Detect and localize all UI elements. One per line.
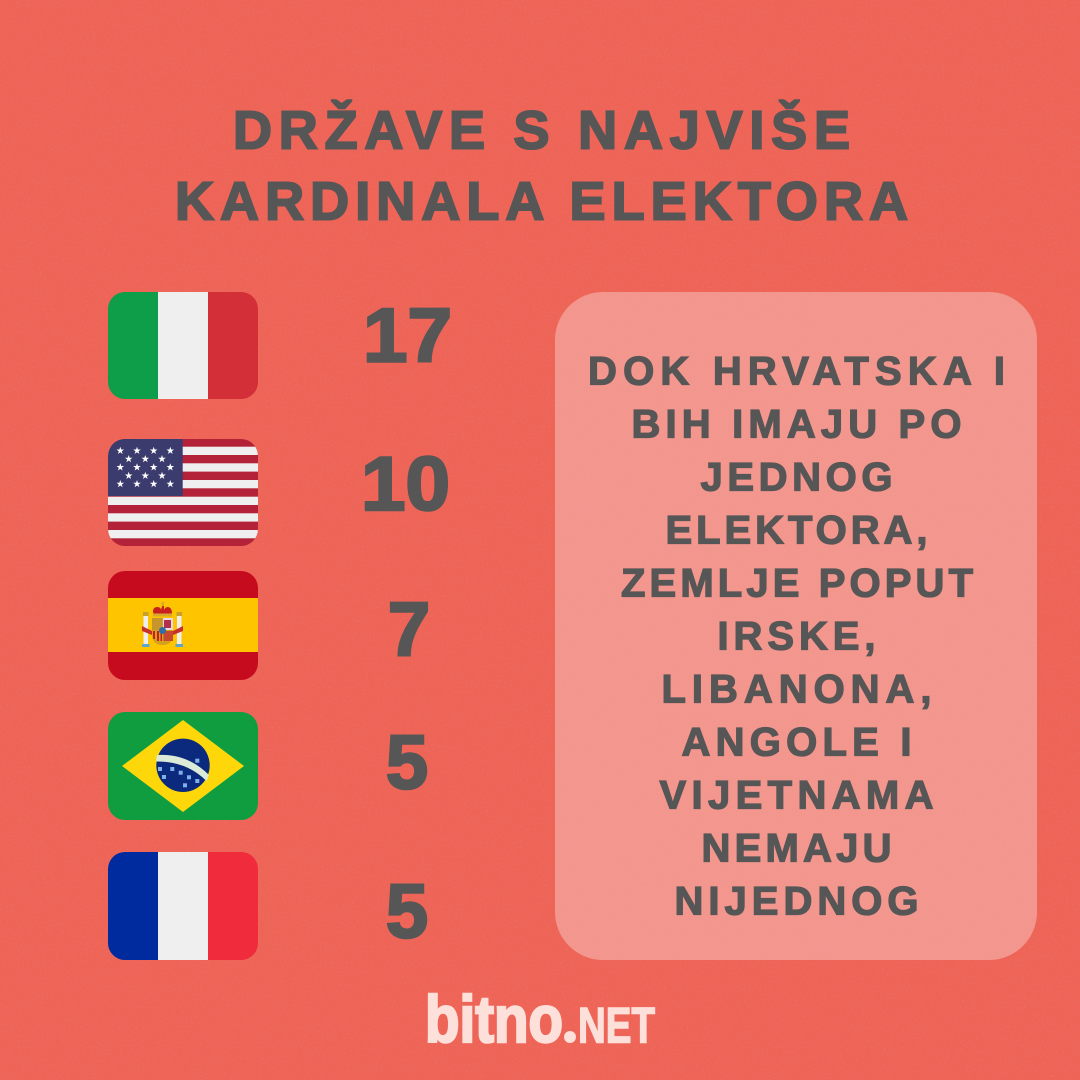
callout text: VIJETNAMA bbox=[660, 774, 934, 818]
callout text: BIH IMAJU PO bbox=[632, 402, 962, 446]
number: Spain: 7 bbox=[388, 588, 430, 672]
number: USA: 10 bbox=[361, 442, 450, 527]
callout text: ANGOLE I bbox=[682, 720, 912, 764]
panel: callout bbox=[555, 292, 1037, 960]
callout text: LIBANONA, bbox=[662, 668, 932, 712]
logo: bitno.net: NET bbox=[578, 998, 655, 1054]
flag: Spain bbox=[108, 571, 258, 680]
callout text bbox=[588, 350, 1005, 924]
callout text: JEDNOG bbox=[700, 456, 892, 500]
title: DRŽAVE S NAJVIŠE bbox=[233, 100, 850, 160]
flag: USA bbox=[108, 439, 258, 546]
logo: bitno.net: bitno bbox=[425, 982, 563, 1056]
flag: France bbox=[108, 852, 258, 960]
title: KARDINALA ELEKTORA bbox=[175, 172, 908, 232]
flag: Italy bbox=[108, 292, 258, 399]
number: Italy: 17 bbox=[363, 294, 452, 378]
title bbox=[175, 100, 908, 232]
flag: Brazil bbox=[108, 712, 258, 820]
callout text: ZEMLJE POPUT bbox=[621, 562, 973, 606]
callout text: DOK HRVATSKA I bbox=[588, 350, 1005, 394]
callout text: NIJEDNOG bbox=[674, 880, 918, 924]
callout text: NEMAJU bbox=[702, 826, 892, 870]
callout text: IRSKE, bbox=[718, 614, 876, 658]
number: France: 5 bbox=[386, 870, 428, 954]
callout text: ELEKTORA, bbox=[666, 508, 928, 552]
number: Brazil: 5 bbox=[386, 720, 428, 806]
icon: coat of arms bbox=[142, 602, 183, 647]
